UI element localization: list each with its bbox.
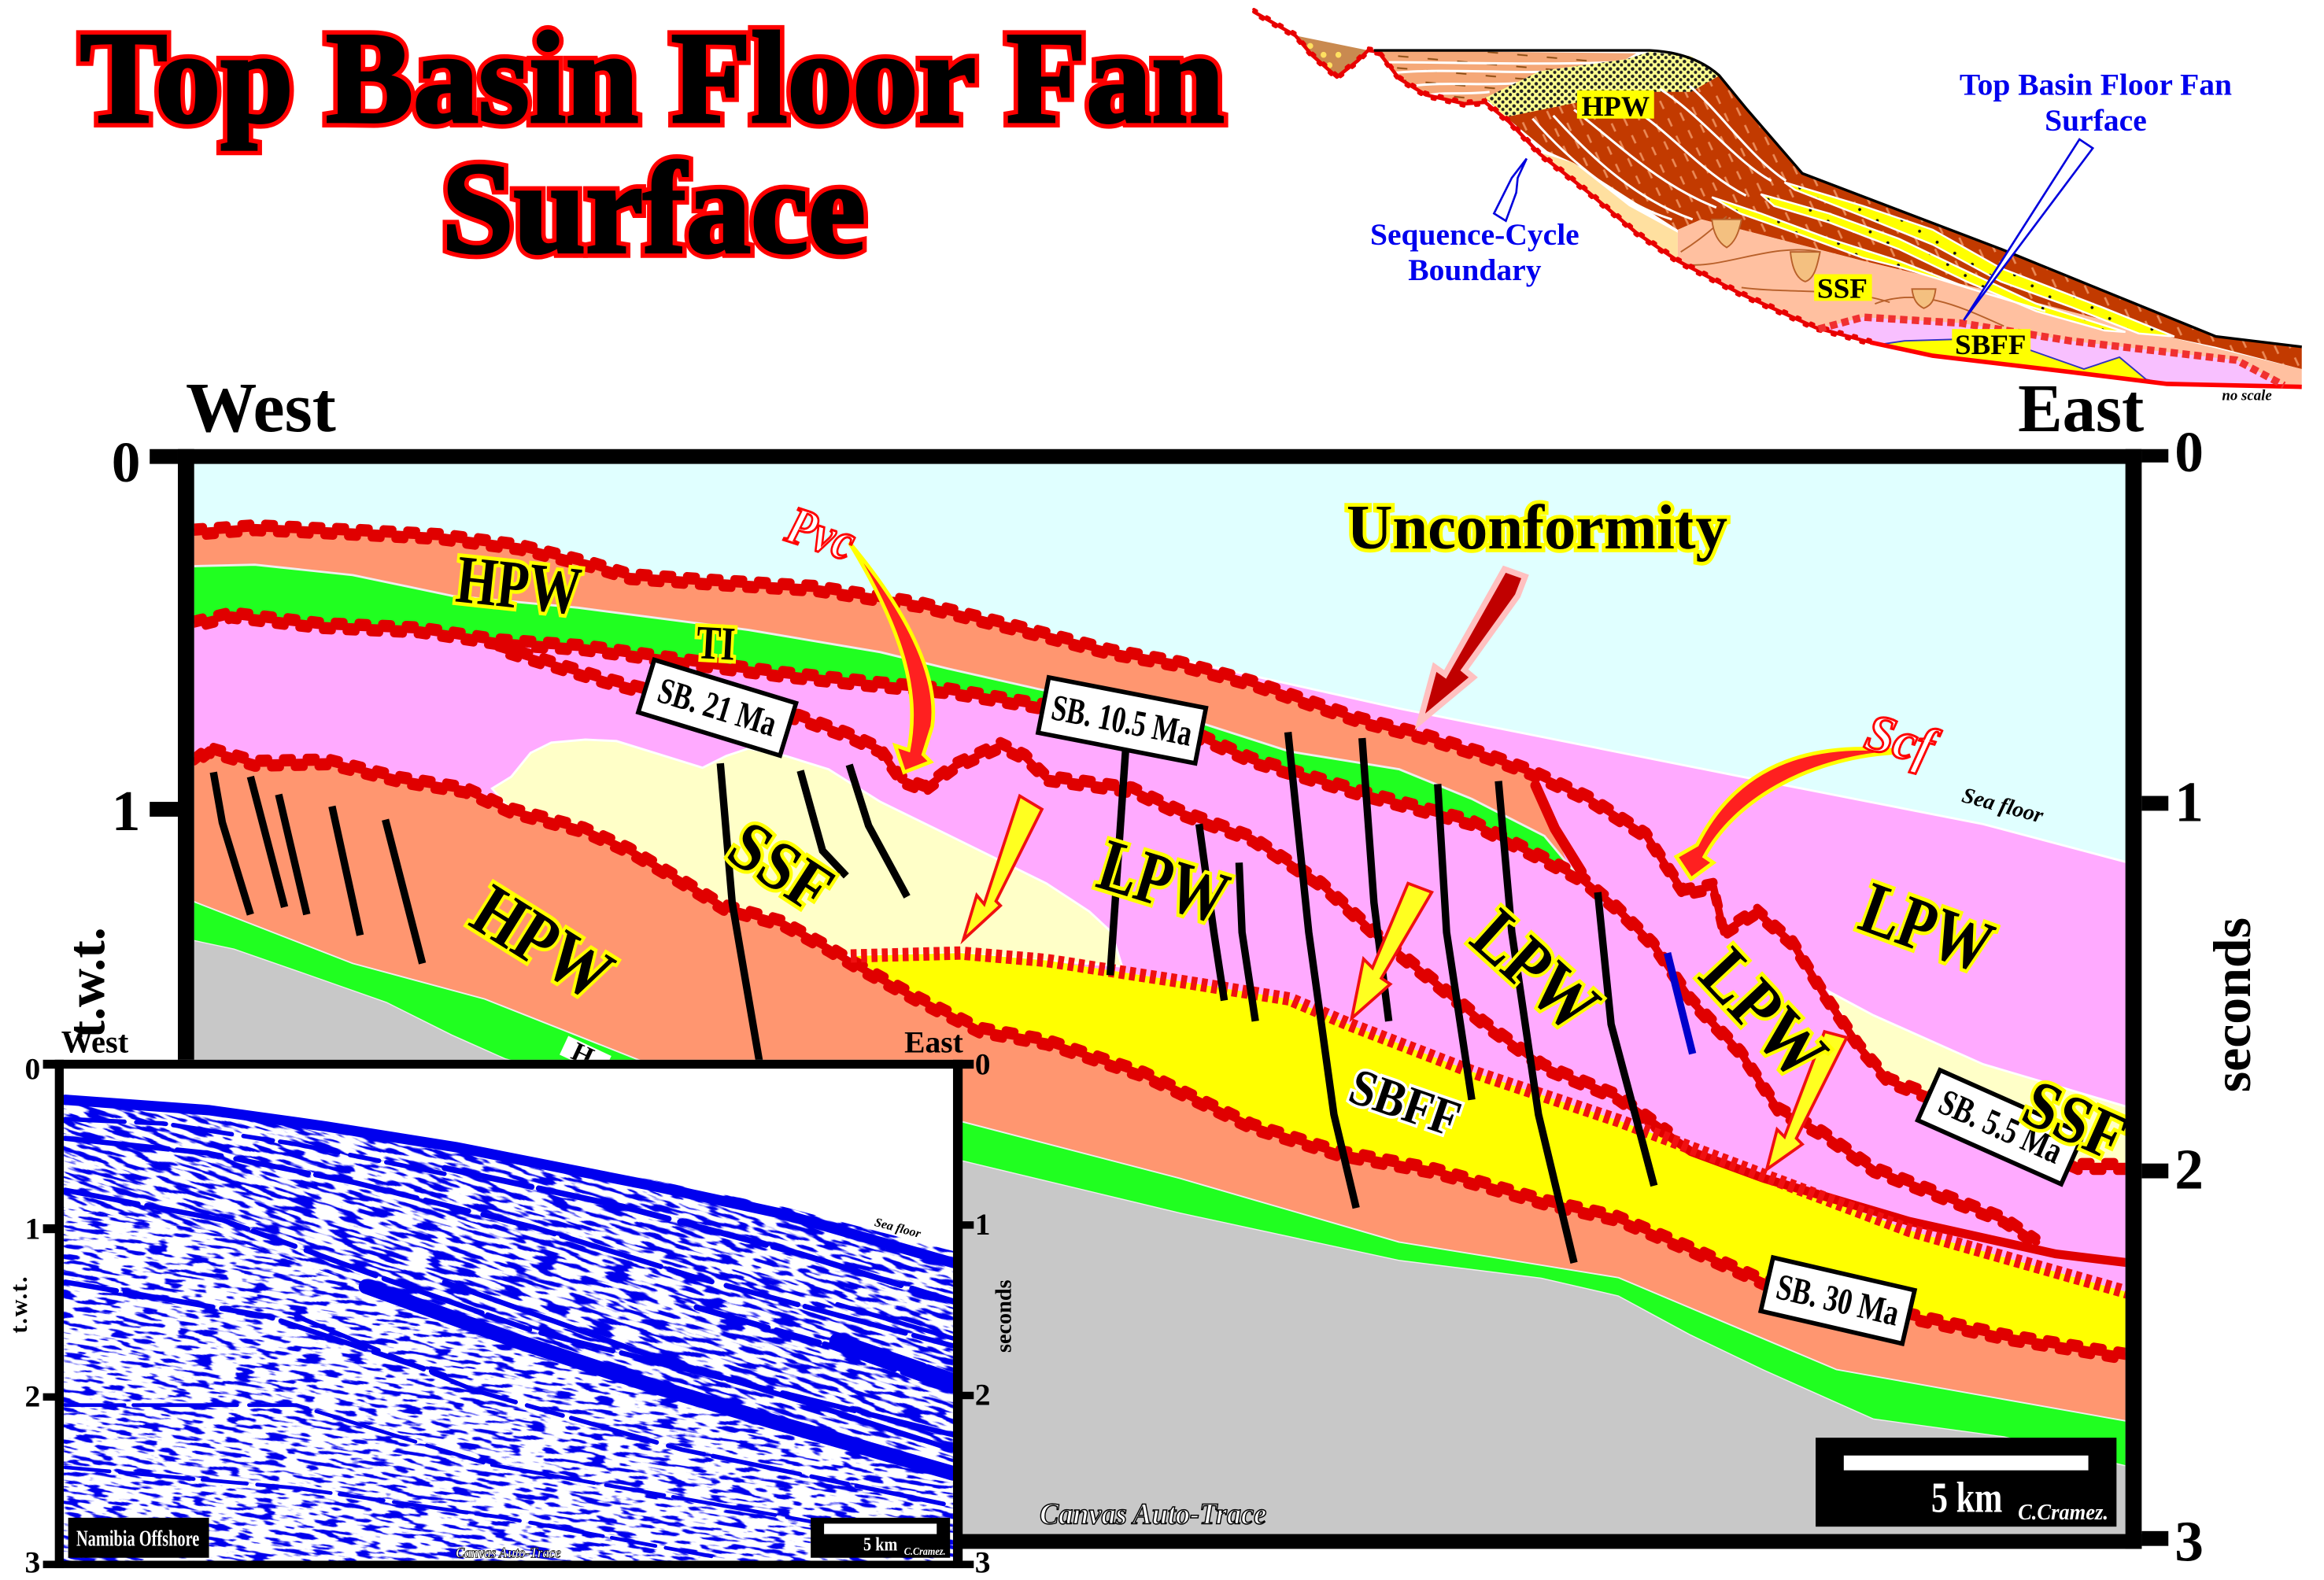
inset heading West: West xyxy=(61,1024,129,1059)
layer: grey basement xyxy=(193,940,2128,1541)
title: Surface xyxy=(442,135,866,280)
arrow: Scf xyxy=(1676,749,1891,879)
callout: sequence-cycle boundary xyxy=(1370,217,1580,287)
layer: upper orange HPW xyxy=(193,528,1567,862)
callout: sequence-cycle boundary: Boundary xyxy=(1408,253,1542,287)
label SSF: SSF xyxy=(1817,273,1868,305)
arrow: sequence boundary pointer xyxy=(1494,159,1527,221)
layer: upper green TI xyxy=(193,565,1581,879)
white background xyxy=(55,1060,962,1568)
inset frame and ticks xyxy=(43,1060,974,1568)
layer: cream SSF west xyxy=(492,740,1122,966)
panel: seismic inset xyxy=(6,1024,1016,1580)
arrow: bolt west xyxy=(963,796,1042,940)
title xyxy=(80,5,1225,280)
title: Top Basin Floor Fan xyxy=(80,5,1225,150)
inset axis title t.w.t.: t.w.t. xyxy=(6,1275,32,1334)
inset axis title seconds: seconds xyxy=(992,1279,1016,1353)
label Pvc: Pvc xyxy=(779,495,863,572)
tag SB 30 Ma: SB. 30 Ma xyxy=(1772,1266,1903,1335)
axis title t.w.t.: t.w.t. xyxy=(57,927,116,1039)
axis title seconds: seconds xyxy=(2203,917,2262,1092)
inset axis numbers: 2 xyxy=(975,1378,991,1412)
wavy red horizon: SB 30 Ma xyxy=(194,745,2126,1360)
callout: top basin floor fan surface: Surface xyxy=(2045,103,2147,138)
inset watermark: Canvas Auto-Trace xyxy=(456,1545,561,1562)
inset axis numbers: 0 xyxy=(25,1051,40,1086)
inset axis numbers: 0 xyxy=(975,1047,991,1082)
label SSF west: SSF xyxy=(715,806,847,928)
slope fan xyxy=(1678,220,2302,386)
inset axis numbers: 2 xyxy=(25,1379,40,1414)
watermark: Canvas Auto-Trace xyxy=(1040,1497,1266,1530)
label SBFF: SBFF xyxy=(1343,1058,1468,1149)
inset heading East: East xyxy=(904,1024,963,1059)
title: Surface xyxy=(442,135,866,280)
label LPW centre: LPW xyxy=(1456,894,1615,1048)
label SSF east: SSF xyxy=(2012,1065,2138,1176)
tag SB 10.5 Ma xyxy=(1038,677,1206,763)
label HPW upper: HPW xyxy=(453,541,585,629)
layer: yellow SBFF xyxy=(851,953,2128,1357)
arrow: unconformity xyxy=(1420,569,1525,722)
faults xyxy=(213,733,1654,1263)
arrow: bolt centre xyxy=(1352,884,1432,1018)
sky water xyxy=(194,464,2126,1538)
label Sea floor: Sea floor xyxy=(1960,783,2047,829)
label Scf: Scf xyxy=(1860,702,1945,778)
layer: lower green xyxy=(193,901,2128,1466)
inset axis numbers: 3 xyxy=(25,1545,40,1580)
layer: cream SSF east xyxy=(1829,991,2128,1166)
panel: interpreted seismic line xyxy=(57,420,2262,1574)
yellow turbidite strips xyxy=(1712,183,2174,337)
axis numbers: 0 xyxy=(2174,420,2204,484)
callout: top basin floor fan surface xyxy=(1960,68,2232,138)
scale bar xyxy=(1816,1438,2116,1526)
white clinoform lines xyxy=(1532,86,1786,220)
title: Top Basin Floor Fan xyxy=(80,5,1225,150)
layer: pink LPW xyxy=(193,528,2128,1293)
label LPW fold: LPW xyxy=(1684,933,1843,1095)
sea floor line xyxy=(1180,659,2128,862)
axis numbers: 3 xyxy=(2174,1510,2204,1574)
axis numbers xyxy=(112,420,2204,1574)
top basin floor fan dashed surface xyxy=(1819,317,2284,386)
arrow: Pvc xyxy=(849,542,933,772)
axis numbers: 0 xyxy=(112,430,140,494)
seismic reflections xyxy=(64,1098,953,1562)
inset axis numbers: 3 xyxy=(975,1545,991,1580)
wavy red horizon: unconformity xyxy=(194,523,2126,1171)
red unconformity xyxy=(1254,9,1871,345)
wavy red horizon: SB 10.5 Ma xyxy=(194,611,2037,1246)
inset axis numbers: 1 xyxy=(25,1212,40,1246)
tag SB 5.5 Ma: SB. 5.5 Ma xyxy=(1933,1082,2068,1172)
blue fault xyxy=(1668,953,1693,1054)
arrow: top basin floor surface pointer xyxy=(1964,139,2093,320)
inset scale bar: C.Cramez. xyxy=(904,1545,946,1558)
inset location tag xyxy=(68,1518,209,1558)
tag SB 21 Ma: SB. 21 Ma xyxy=(653,670,781,744)
heading East: East xyxy=(2018,371,2144,446)
basin floor fan yellow xyxy=(1871,339,2167,384)
stippled shelf edge xyxy=(1485,52,1720,117)
frame and axis ticks xyxy=(150,449,2168,1549)
wavy red horizon: SB 21 Ma xyxy=(498,644,1669,1139)
tan shelf strata xyxy=(1374,50,1636,104)
label TI: TI xyxy=(695,616,737,671)
heading West: West xyxy=(186,367,336,447)
top slope line xyxy=(1374,50,2302,347)
callout: top basin floor fan surface: Top Basin Floor Fan xyxy=(1960,68,2232,102)
axis numbers: 1 xyxy=(112,779,140,843)
inset scale bar xyxy=(811,1518,950,1558)
label LPW west: LPW xyxy=(1089,824,1238,940)
dark brown clinoforms and lower slope xyxy=(1506,76,2302,369)
diagram: sequence-cycle cross-section xyxy=(1254,9,2302,404)
label HPW: HPW xyxy=(1581,90,1650,122)
buried label tag xyxy=(557,1032,613,1079)
inset axis numbers: 1 xyxy=(975,1207,991,1242)
tag SB 21 Ma xyxy=(638,660,796,755)
layer: lower orange HPW xyxy=(193,750,2128,1421)
inset scale bar: 5 km xyxy=(863,1534,897,1555)
tag SB 10.5 Ma: SB. 10.5 Ma xyxy=(1048,687,1195,755)
basin floor fan pink xyxy=(1819,317,2284,386)
cream wedge xyxy=(1540,153,1678,261)
dashed top basin floor fan surface xyxy=(851,953,2128,1293)
inset sea floor label: Sea floor xyxy=(873,1216,922,1241)
axis numbers: 1 xyxy=(2174,770,2204,834)
axis numbers: 2 xyxy=(2174,1138,2204,1202)
callout: sequence-cycle boundary: Sequence-Cycle xyxy=(1370,217,1580,252)
buried label tag: H xyxy=(567,1037,598,1072)
no scale note: no scale xyxy=(2222,388,2272,404)
basin floor solid surface xyxy=(1871,342,2302,387)
small channel fill xyxy=(1295,35,1368,77)
label LPW east: LPW xyxy=(1850,866,2004,989)
scale bar: 5 km xyxy=(1931,1473,2002,1521)
inset location tag: Namibia Offshore xyxy=(76,1527,199,1552)
label HPW lower: HPW xyxy=(458,869,627,1017)
arrow: bolt east xyxy=(1767,1032,1847,1169)
canyon fills xyxy=(1712,220,1936,308)
label SBFF: SBFF xyxy=(1955,329,2026,360)
scale bar: C.Cramez. xyxy=(2018,1501,2108,1525)
inset axis numbers xyxy=(25,1047,991,1580)
label Unconformity: Unconformity xyxy=(1347,492,1727,563)
tag SB 5.5 Ma xyxy=(1918,1070,2083,1184)
thick red horizon xyxy=(1646,1120,2128,1263)
